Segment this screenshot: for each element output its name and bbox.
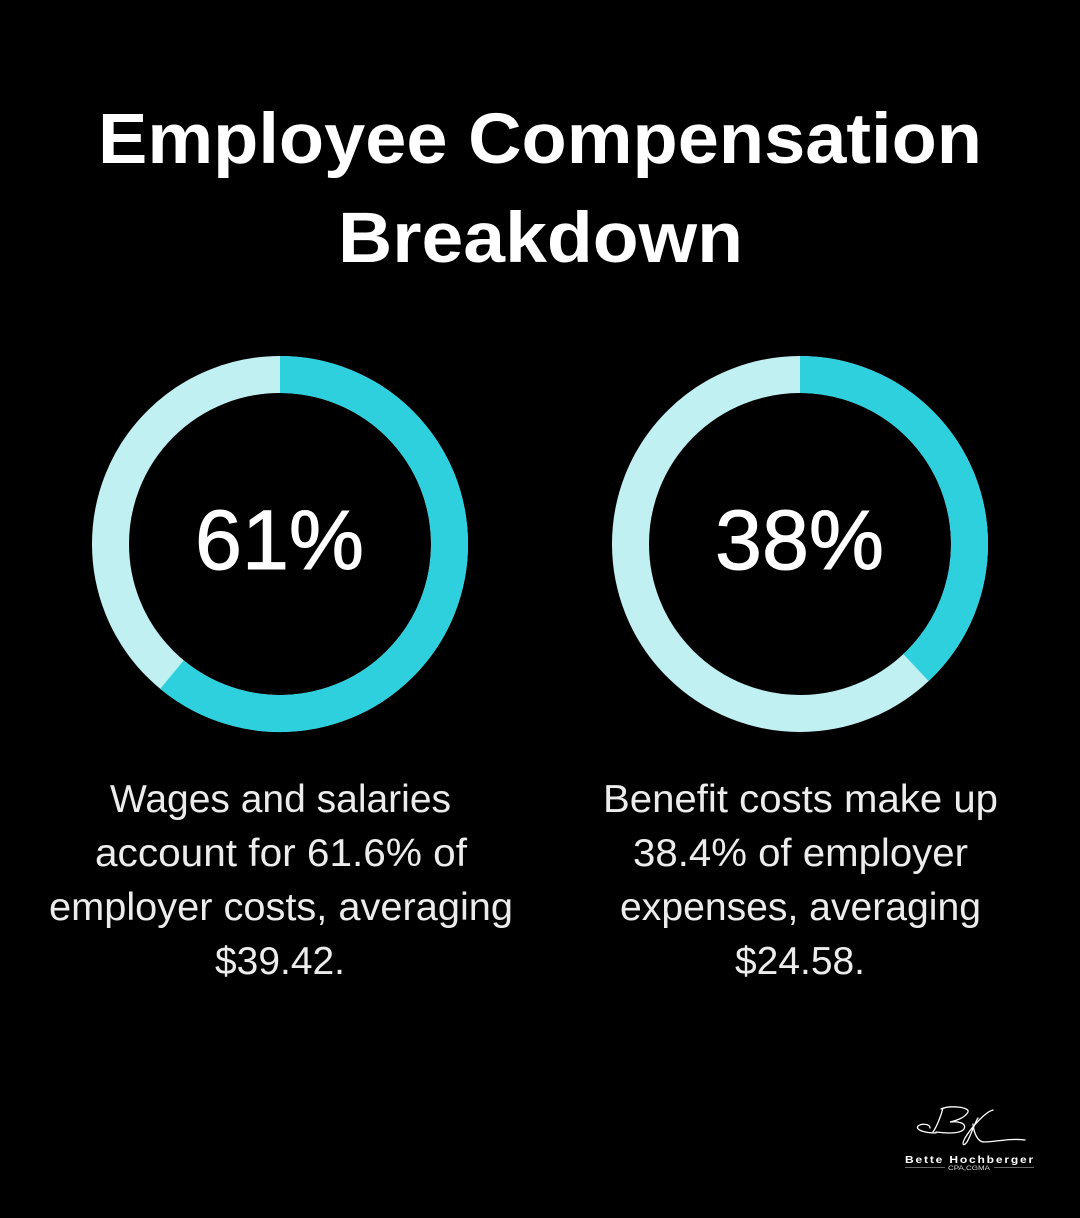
description: benefit costs: 38.4% of employer [633, 832, 968, 875]
donut chart: 38% [630, 374, 970, 714]
panel: benefit costs [603, 374, 998, 983]
description: benefit costs: Benefit costs make up [603, 778, 998, 821]
title: Employee Compensation [98, 100, 982, 179]
description: wages and salaries: account for 61.6% of [95, 832, 467, 875]
value: 61%: 61% [195, 493, 364, 587]
donut chart: 61% [110, 374, 450, 714]
icon: BH signature [917, 1107, 1025, 1145]
credentials: CPA,CGMA [948, 1166, 990, 1172]
description: wages and salaries: employer costs, averaging [49, 886, 513, 929]
title [98, 100, 982, 278]
description: wages and salaries: Wages and salaries [110, 778, 451, 821]
description: benefit costs: expenses, averaging [620, 886, 981, 929]
panel: wages and salaries [49, 374, 513, 983]
title: Breakdown [338, 199, 743, 278]
description: benefit costs: $24.58. [735, 940, 865, 983]
description: wages and salaries [49, 778, 513, 983]
wordmark: Bette Hochberger [905, 1154, 1035, 1166]
description: benefit costs [603, 778, 998, 983]
logo: Bette Hochberger [905, 1107, 1035, 1172]
value: 38%: 38% [715, 493, 884, 587]
description: wages and salaries: $39.42. [215, 940, 345, 983]
